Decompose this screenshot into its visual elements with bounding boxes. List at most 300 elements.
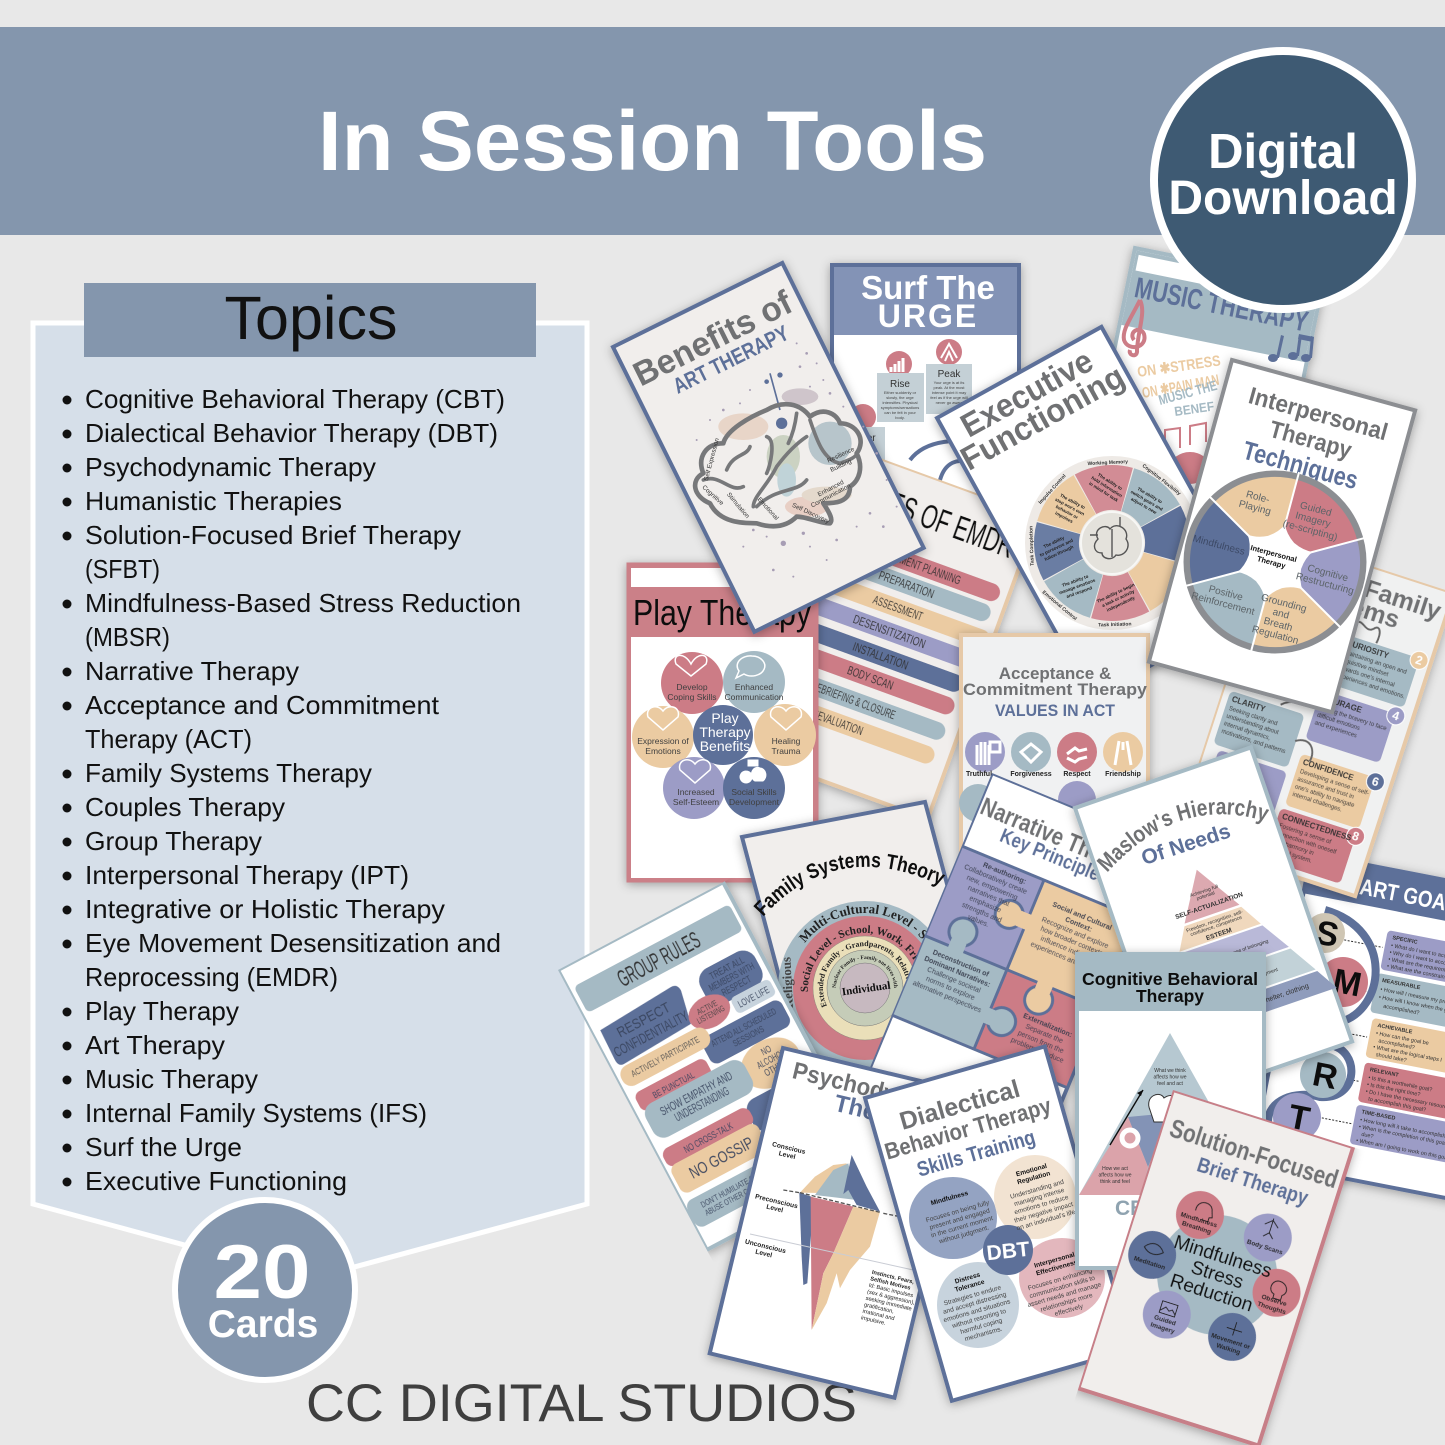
eight step boxes: 2 bbox=[1414, 653, 1425, 668]
topics bullet list: Surf the Urge bbox=[85, 1132, 242, 1162]
card: cognitive behavioral therapy: Therapy bbox=[1136, 986, 1204, 1006]
CBT triangle bbox=[1079, 1033, 1261, 1220]
stage: rise bbox=[877, 351, 924, 422]
iceberg: Level bbox=[778, 1150, 796, 1161]
topics bullet list: Music Therapy bbox=[85, 1064, 258, 1094]
stage: peak: Peak bbox=[938, 369, 961, 380]
mindfulness stress reduction diagram: Thoughts bbox=[1256, 1301, 1287, 1316]
DBT skill blobs: without judgment. bbox=[937, 1224, 990, 1246]
card: group rules bbox=[558, 882, 872, 1250]
techniques wheel: Role- bbox=[1245, 489, 1271, 506]
eight step boxes: CURIOSITY bbox=[1346, 638, 1390, 661]
pyramid: Food, water, warmth, shelter, clothing bbox=[1198, 983, 1310, 1027]
executive functions wheel: impulses bbox=[1054, 510, 1074, 524]
DBT skill blobs: Regulation bbox=[1016, 1170, 1051, 1186]
value icons: Truthful bbox=[966, 771, 992, 778]
eight step boxes: CONNECTEDNESS bbox=[1281, 812, 1353, 843]
pyramid: potential bbox=[1196, 890, 1216, 902]
brain illustration with splatter: Emotional bbox=[756, 496, 780, 522]
card: dialectical behavior therapy: Dialectical bbox=[896, 1075, 1023, 1136]
value icons: Forgiveness bbox=[1010, 771, 1052, 778]
DBT skill blobs: Strategies to endure bbox=[943, 1284, 1002, 1307]
brain illustration with splatter: Communication bbox=[810, 482, 852, 509]
mindfulness stress reduction diagram: Mindfulness bbox=[1180, 1211, 1218, 1230]
flower diagram: Emotions bbox=[645, 746, 681, 756]
stage: peak: feel as if the urge will bbox=[930, 395, 968, 400]
DBT skill blobs: and accept distressing bbox=[942, 1291, 1008, 1316]
CBT triangle: affects how we bbox=[1154, 1074, 1187, 1080]
phase bars bbox=[739, 515, 1008, 770]
executive functions wheel: Task Initiation bbox=[1098, 621, 1132, 629]
iceberg: Preconscious bbox=[754, 1193, 799, 1210]
badge: 20 cards bbox=[175, 1200, 355, 1380]
techniques wheel: Therapy bbox=[1256, 554, 1287, 571]
rule blobs: ATTEND ALL SCHEDULED bbox=[710, 1006, 778, 1049]
iceberg: Selfish Motives bbox=[870, 1276, 911, 1292]
card: internal family systems: Systems bbox=[1297, 576, 1403, 634]
card: phases of EMDR bbox=[722, 441, 1038, 819]
card: narrative therapy key principles: problem to reduce bbox=[1010, 1037, 1065, 1065]
techniques wheel: Playing bbox=[1238, 499, 1272, 518]
card: music therapy bbox=[1073, 248, 1322, 592]
topics heading bbox=[84, 283, 536, 357]
executive functions wheel: follow through bbox=[1044, 544, 1074, 562]
badge: 20 cards: Cards bbox=[208, 1303, 318, 1346]
eight step boxes: Fostering a sense of bbox=[1278, 823, 1332, 846]
DBT skill blobs: harmful coping bbox=[960, 1317, 1003, 1336]
stage: peak: intense point it may bbox=[932, 390, 966, 395]
goal boxes: RELEVANT bbox=[1369, 1067, 1400, 1079]
eight step boxes: internal system. bbox=[1271, 846, 1313, 865]
DBT skill blobs: effectively bbox=[1054, 1303, 1085, 1318]
topics bullet list: Reprocessing (EMDR) bbox=[85, 962, 338, 992]
topics bullet list: Acceptance and Commitment bbox=[85, 690, 440, 720]
card: family systems theory bbox=[736, 797, 951, 1067]
techniques wheel: Regulation bbox=[1251, 624, 1300, 647]
techniques wheel: Cognitive bbox=[1306, 563, 1350, 584]
executive functions wheel: switch gears and bbox=[1130, 489, 1164, 512]
topics bullet list: Psychodynamic Therapy bbox=[85, 452, 376, 482]
rule blobs: SESSIONS bbox=[731, 1024, 766, 1049]
mindfulness stress reduction diagram: Meditation bbox=[1133, 1255, 1166, 1272]
executive functions wheel: Emotional Control bbox=[1041, 590, 1078, 622]
stage: rise: Either suddenly or bbox=[884, 390, 917, 395]
value icons: Respect bbox=[1063, 771, 1091, 778]
DBT skill blobs: relationships more bbox=[1040, 1292, 1094, 1314]
icon: music notes bbox=[1268, 334, 1314, 362]
flower diagram: Develop bbox=[676, 682, 708, 692]
topics bullet list: Internal Family Systems (IFS) bbox=[85, 1098, 427, 1128]
iceberg: Id: Basic impulses bbox=[868, 1283, 914, 1299]
executive functions wheel: adjust to new bbox=[1130, 496, 1158, 515]
card: benefits of art therapy: Benefits of bbox=[627, 283, 799, 394]
goal boxes: SPECIFIC bbox=[1392, 935, 1418, 946]
DBT skill blobs: communication skills to bbox=[1029, 1275, 1096, 1300]
pyramid: Achieving full bbox=[1189, 884, 1219, 899]
techniques wheel: Reinforcement bbox=[1190, 590, 1256, 618]
phase bars: PREPARATION bbox=[877, 568, 936, 601]
flower diagram: Development bbox=[729, 797, 780, 807]
DBT skill blobs: emotions and situations bbox=[943, 1298, 1012, 1324]
topics bullet list: Couples Therapy bbox=[85, 792, 285, 822]
DBT skill blobs: without resorting to bbox=[950, 1308, 1007, 1330]
goal boxes: • How can the goal be bbox=[1375, 1031, 1429, 1047]
DBT skill blobs: mechanisms. bbox=[964, 1326, 1003, 1343]
stage: rise: slowly, the urge bbox=[886, 395, 915, 400]
card: narrative therapy key principles: experiences and values bbox=[1029, 941, 1100, 976]
flower diagram bbox=[632, 651, 816, 819]
card: narrative therapy key principles: Re-authoring: bbox=[982, 862, 1027, 886]
icon: wave bbox=[910, 441, 990, 480]
executive functions wheel: a task or activity bbox=[1101, 589, 1136, 608]
iceberg: irrational and bbox=[862, 1309, 895, 1322]
card: solution-focused brief therapy bbox=[1078, 1090, 1353, 1445]
DBT skill blobs: assert needs and manage bbox=[1027, 1281, 1102, 1309]
SMART letter track: R bbox=[1309, 1055, 1341, 1097]
DBT skill blobs: in the current moment bbox=[930, 1215, 994, 1239]
topics bullet list: Group Therapy bbox=[85, 826, 262, 856]
eight step boxes: internal dynamics, bbox=[1223, 721, 1271, 742]
mindfulness stress reduction diagram: Mindfulness bbox=[1171, 1232, 1274, 1283]
card: cognitive behavioral therapy bbox=[1077, 954, 1264, 1268]
eight step boxes: difficult emotions bbox=[1316, 713, 1360, 732]
eight step boxes: and experiences bbox=[1314, 720, 1357, 740]
eight step boxes: internal challenges. bbox=[1291, 792, 1343, 814]
card: psychodynamic therapy: Psychodynamic bbox=[790, 1057, 961, 1123]
executive functions wheel bbox=[1025, 456, 1199, 630]
topics heading: Topics bbox=[225, 284, 397, 352]
eight step boxes: understanding about bbox=[1225, 714, 1280, 736]
rule blobs: OTHER bbox=[763, 1058, 789, 1079]
card: acceptance and commitment therapy: Commitment Therapy bbox=[963, 680, 1148, 699]
executive functions wheel: hold information bbox=[1090, 475, 1123, 498]
stage: lower: Lower bbox=[848, 433, 876, 444]
goal boxes: accomplished? bbox=[1378, 1038, 1415, 1051]
connecting arrows bbox=[1267, 607, 1382, 770]
rule blobs: NO bbox=[759, 1044, 774, 1058]
executive functions wheel: The ability to bbox=[1097, 472, 1123, 491]
topics bullet list: Integrative or Holistic Therapy bbox=[85, 894, 445, 924]
goal boxes: due? bbox=[1361, 1132, 1374, 1140]
DBT skill blobs: on an individual's life bbox=[1016, 1209, 1076, 1232]
eight step boxes: experiences and emotions. bbox=[1335, 673, 1406, 701]
CBT triangle: think and feel bbox=[1100, 1179, 1130, 1185]
phase bars: BODY SCAN bbox=[845, 663, 895, 693]
card: group rules: GROUP RULES bbox=[613, 927, 705, 993]
rule blobs: ALCOHOL bbox=[755, 1048, 787, 1072]
DBT skill blobs: Understanding and bbox=[1009, 1179, 1065, 1201]
eight step boxes: COURAGE bbox=[1321, 694, 1364, 715]
card: narrative therapy key principles: Dominant Narratives: bbox=[923, 956, 991, 989]
stage: rise: Rise bbox=[890, 379, 910, 390]
flower diagram: Social Skills bbox=[731, 787, 777, 797]
card: narrative therapy key principles: values. bbox=[967, 914, 990, 929]
goal boxes: ACHIEVABLE bbox=[1377, 1023, 1413, 1036]
rule blobs: ACTIVELY PARTICIPATE bbox=[629, 1035, 701, 1079]
rule blobs: ABUSE OTHER CARDS bbox=[704, 1180, 764, 1218]
mindfulness stress reduction diagram: Imagery bbox=[1149, 1321, 1176, 1336]
pyramid: ESTEEM bbox=[1205, 927, 1233, 942]
goal boxes: TIME-BASED bbox=[1361, 1109, 1396, 1122]
DBT skill blobs: Focuses on enhancing bbox=[1027, 1267, 1093, 1292]
DBT skill blobs: emotions to reduce bbox=[1014, 1194, 1070, 1216]
DBT skill blobs: managing intense bbox=[1013, 1187, 1066, 1208]
card: music therapy: MUSIC THERAPY bbox=[1132, 272, 1311, 339]
pyramid bbox=[1108, 839, 1337, 1049]
eight step boxes: and harmony in bbox=[1273, 839, 1314, 857]
iceberg: impulsive. bbox=[860, 1315, 887, 1327]
eight step boxes: connection with oneself bbox=[1276, 831, 1337, 856]
pyramid: Freedom, recognition, self- bbox=[1186, 909, 1244, 934]
iceberg: gratification, bbox=[863, 1302, 895, 1315]
techniques wheel: Mindfulness bbox=[1191, 533, 1246, 558]
card: narrative therapy key principles: how broader contexts bbox=[1039, 926, 1104, 958]
card: narrative therapy key principles: Context: bbox=[1064, 916, 1093, 934]
phase bars: ASSESSMENT bbox=[871, 593, 925, 624]
card: acceptance and commitment therapy bbox=[959, 635, 1148, 955]
goal boxes: • What are the logical steps I bbox=[1373, 1044, 1443, 1064]
topics bullet list: Interpersonal Therapy (IPT) bbox=[85, 860, 409, 890]
iceberg: seeking immediate bbox=[865, 1296, 912, 1313]
puzzle bbox=[892, 846, 1137, 1088]
phase bars: INSTALLATION bbox=[851, 640, 910, 673]
phase bars: REEVALUATION bbox=[806, 705, 865, 738]
rule blobs: NO CROSS-TALK bbox=[682, 1121, 735, 1156]
card: benefits of art therapy: ART THERAPY bbox=[669, 320, 793, 399]
eight step boxes bbox=[1184, 599, 1430, 889]
CBT triangle: CBT bbox=[1115, 1197, 1158, 1220]
card: narrative therapy key principles: emphasize bbox=[968, 895, 1002, 915]
eight step boxes: assurance and trust in bbox=[1296, 777, 1354, 801]
brain illustration with splatter: Enhanced bbox=[817, 479, 846, 498]
card: narrative therapy key principles: Separate the bbox=[1024, 1023, 1064, 1045]
eight step boxes: 8 bbox=[1350, 829, 1361, 844]
music benefit words bbox=[1136, 352, 1222, 484]
concentric system levels: Religious bbox=[778, 957, 796, 1009]
stage: rise: intensifies. Physical bbox=[883, 400, 918, 405]
card: interpersonal therapy techniques: Techniques bbox=[1240, 435, 1361, 495]
pyramid: confidence, competence bbox=[1190, 915, 1243, 938]
mindfulness stress reduction diagram: Walking bbox=[1215, 1342, 1241, 1356]
header banner bbox=[0, 27, 1445, 235]
mindfulness stress reduction diagram: Body Scans bbox=[1246, 1239, 1284, 1257]
DBT skill blobs: Distress bbox=[954, 1272, 981, 1286]
card: surf the urge bbox=[832, 265, 1019, 565]
card: narrative therapy key principles: alternative perspectives bbox=[911, 980, 983, 1015]
rule blobs: LISTENING bbox=[696, 1004, 726, 1026]
topics bullet list: Art Therapy bbox=[85, 1030, 225, 1060]
brain illustration with splatter: Resilience bbox=[826, 446, 856, 465]
card: internal family systems bbox=[1174, 534, 1445, 896]
executive functions wheel: manage emotions bbox=[1058, 577, 1096, 595]
rule blobs: TREAT ALL bbox=[708, 955, 747, 983]
value icons bbox=[959, 732, 1143, 822]
brain illustration with splatter: Self Expression bbox=[703, 437, 721, 482]
concentric system levels: Multi-Cultural Level - Society bbox=[798, 904, 926, 943]
goal boxes: to accomplish this goal? bbox=[1368, 1096, 1426, 1114]
card: psychodynamic therapy bbox=[710, 1048, 968, 1398]
techniques wheel bbox=[1182, 469, 1368, 655]
goal boxes: • Is this the right time? bbox=[1366, 1082, 1421, 1098]
concentric system levels: Nuclear Family - Family one lives with bbox=[832, 955, 898, 988]
CBT triangle: What we think bbox=[1154, 1068, 1186, 1074]
flower diagram: Enhanced bbox=[735, 682, 773, 692]
techniques wheel: Guided bbox=[1299, 500, 1333, 519]
iceberg: Unconscious bbox=[744, 1239, 787, 1255]
card: executive functioning bbox=[937, 327, 1257, 698]
rule blobs: ACTIVE bbox=[695, 999, 719, 1017]
card: narrative therapy key principles: Social and Cultural bbox=[1051, 901, 1112, 932]
eight step boxes: Seeking clarity and bbox=[1228, 706, 1278, 727]
card: interpersonal therapy techniques: Interpersonal bbox=[1246, 382, 1391, 446]
rule blobs: CONFIDENTIALITY bbox=[611, 1008, 691, 1061]
topics bullet list: Play Therapy bbox=[85, 996, 239, 1026]
DBT skill blobs: Mindfulness bbox=[930, 1190, 969, 1207]
rule blobs: RESPECT bbox=[614, 999, 673, 1041]
executive functions wheel: The ability to bbox=[1061, 574, 1089, 588]
DBT skill blobs: Effectiveness bbox=[1035, 1259, 1079, 1277]
topics bullet list: Mindfulness-Based Stress Reduction bbox=[85, 588, 521, 618]
phase bars: DEBRIEFING & CLOSURE bbox=[810, 679, 897, 722]
goal boxes: • When is the completion of this goal bbox=[1358, 1124, 1445, 1147]
goal boxes: accomplished? bbox=[1383, 1004, 1420, 1017]
iceberg: Conscious bbox=[771, 1141, 806, 1156]
badge: digital download: Download bbox=[1168, 172, 1398, 225]
card: dialectical behavior therapy: Behavior Therapy bbox=[882, 1092, 1054, 1165]
eight step boxes: towards one's internal bbox=[1338, 665, 1395, 689]
pyramid: Love, friends, family, sense of belonging bbox=[1183, 938, 1270, 973]
phase bars: DESENSITIZATION bbox=[851, 612, 927, 651]
DBT skill blobs: Focuses on being fully bbox=[925, 1199, 991, 1224]
eight step boxes: inquisitive mindset bbox=[1340, 657, 1389, 678]
flower diagram: Self-Esteem bbox=[673, 797, 719, 807]
card: SMART goals bbox=[1251, 854, 1445, 1237]
topics bullet list: Executive Functioning bbox=[85, 1166, 347, 1196]
card: internal family systems: Internal Family bbox=[1268, 545, 1445, 626]
eight step boxes: Developing a sense of self- bbox=[1299, 769, 1370, 797]
card: phases of EMDR: PHASES OF EMDR bbox=[828, 465, 1020, 566]
rule blobs: NO GOSSIP bbox=[686, 1133, 757, 1183]
executive functions wheel: The ability to bbox=[1136, 486, 1163, 504]
phase bars: TREATMENT PLANNING bbox=[874, 544, 963, 588]
SMART letter track: T bbox=[1285, 1098, 1313, 1139]
executive functions wheel: The ability bbox=[1043, 535, 1065, 549]
mindfulness stress reduction diagram: Stress bbox=[1188, 1257, 1246, 1294]
techniques wheel: Grounding bbox=[1260, 592, 1308, 615]
concentric system levels: Social Level - School, Work, Friends, bbox=[800, 925, 916, 992]
music benefit words: MUSIC THE bbox=[1157, 377, 1219, 408]
flower diagram: Trauma bbox=[772, 746, 801, 756]
stage: peak: Your urge is at its bbox=[934, 380, 964, 385]
concentric system levels: Individual bbox=[841, 980, 891, 998]
card: narrative therapy key principles: Deconstruction of bbox=[932, 949, 990, 979]
brain illustration with splatter: Self Discovery bbox=[791, 502, 831, 526]
techniques wheel: Restructuring bbox=[1295, 571, 1355, 597]
SMART letter track: S bbox=[1312, 913, 1342, 955]
topics bullet list: Cognitive Behavioral Therapy (CBT) bbox=[85, 384, 505, 414]
executive functions wheel: in mind for task bbox=[1088, 481, 1120, 503]
card: narrative therapy key principles bbox=[869, 773, 1168, 1142]
topics bullet list: Family Systems Therapy bbox=[85, 758, 372, 788]
DBT skill blobs: their negative impact bbox=[1014, 1201, 1074, 1225]
card: benefits of art therapy bbox=[613, 263, 924, 632]
stage: peak: peak. At the most bbox=[934, 385, 965, 390]
techniques wheel: Positive bbox=[1207, 584, 1244, 604]
stage: rise: symptoms/sensations bbox=[881, 405, 919, 410]
flower diagram: Therapy bbox=[699, 724, 751, 740]
mindfulness stress reduction diagram: Reduction bbox=[1167, 1271, 1255, 1317]
topics bullet list: Humanistic Therapies bbox=[85, 486, 342, 516]
mindfulness stress reduction diagram: Guided bbox=[1153, 1314, 1177, 1328]
SMART letter track bbox=[1268, 910, 1376, 1141]
card: surf the urge: URGE bbox=[878, 298, 978, 334]
CBT triangle: How we act bbox=[1102, 1166, 1129, 1172]
pyramid: Safety, security, resources, employment bbox=[1193, 967, 1279, 1001]
executive functions wheel: The ability to begin bbox=[1096, 582, 1136, 604]
executive functions wheel: stop one's own bbox=[1054, 497, 1085, 517]
techniques wheel: (re-scripting) bbox=[1281, 518, 1338, 543]
concentric system levels bbox=[778, 901, 928, 1067]
stage: rise: can be felt in your bbox=[884, 410, 916, 415]
card: narrative therapy key principles: Narrative Therapy bbox=[976, 793, 1146, 884]
stage: rise: body. bbox=[895, 415, 905, 420]
goal boxes: should take? bbox=[1375, 1052, 1407, 1064]
card: narrative therapy key principles: Collaboratively create bbox=[963, 864, 1028, 896]
eight step boxes: Maintaining an open and bbox=[1343, 650, 1407, 676]
card: interpersonal therapy techniques bbox=[1149, 360, 1415, 712]
flower diagram: Healing bbox=[772, 736, 801, 746]
flower diagram: Communication bbox=[724, 692, 784, 702]
DBT skill blobs: Interpersonal bbox=[1034, 1251, 1076, 1270]
card: maslow's hierarchy of needs: Of Needs bbox=[1139, 820, 1233, 870]
badge: 20 cards: 20 bbox=[214, 1230, 310, 1315]
eight step boxes: CLARITY bbox=[1231, 695, 1267, 714]
card: narrative therapy key principles: Externalization: bbox=[1022, 1013, 1073, 1039]
flower diagram: Increased bbox=[677, 787, 715, 797]
card: interpersonal therapy techniques: Therapy bbox=[1266, 416, 1355, 465]
title: In Session Tools bbox=[318, 94, 987, 188]
goal boxes: MEASURABLE bbox=[1382, 978, 1421, 991]
techniques wheel: Imagery bbox=[1294, 510, 1332, 530]
techniques wheel: and bbox=[1271, 607, 1290, 622]
flower diagram: Play bbox=[711, 710, 739, 726]
flower diagram: Benefits bbox=[700, 738, 750, 754]
topics bullet list: Narrative Therapy bbox=[85, 656, 299, 686]
pyramid: SELF-ACTUALIZATION bbox=[1175, 891, 1244, 921]
card: play therapy bbox=[628, 564, 817, 881]
topics bullet list: (MBSR) bbox=[85, 622, 170, 652]
eight step boxes: 4 bbox=[1390, 708, 1401, 724]
executive functions wheel: Task Completion bbox=[1028, 526, 1036, 566]
flower diagram: Expression of bbox=[637, 736, 689, 746]
rule blobs bbox=[592, 945, 857, 1230]
brain illustration with splatter bbox=[695, 342, 898, 578]
mindfulness stress reduction diagram: Observe bbox=[1260, 1294, 1288, 1308]
card: acceptance and commitment therapy: VALUES IN ACT bbox=[995, 701, 1116, 720]
techniques wheel: Interpersonal bbox=[1250, 543, 1298, 564]
rule blobs: DON'T HUMILIATE OR bbox=[699, 1172, 760, 1210]
card: dialectical behavior therapy bbox=[865, 1046, 1132, 1401]
rule blobs: RESPECT bbox=[720, 974, 753, 999]
card: narrative therapy key principles: strengths and bbox=[961, 902, 1003, 925]
card: executive functioning: Functioning bbox=[954, 357, 1131, 477]
mindfulness stress reduction diagram: Movement or bbox=[1210, 1332, 1251, 1351]
goal boxes: • Is this a worthwhile goal? bbox=[1368, 1075, 1433, 1093]
card: cognitive behavioral therapy: Cognitive Behavioral bbox=[1082, 969, 1258, 989]
card: narrative therapy key principles: Challenge societal bbox=[926, 966, 982, 995]
iceberg: (sex & aggression), bbox=[866, 1289, 916, 1307]
topics bullet list: Dialectical Behavior Therapy (DBT) bbox=[85, 418, 498, 448]
